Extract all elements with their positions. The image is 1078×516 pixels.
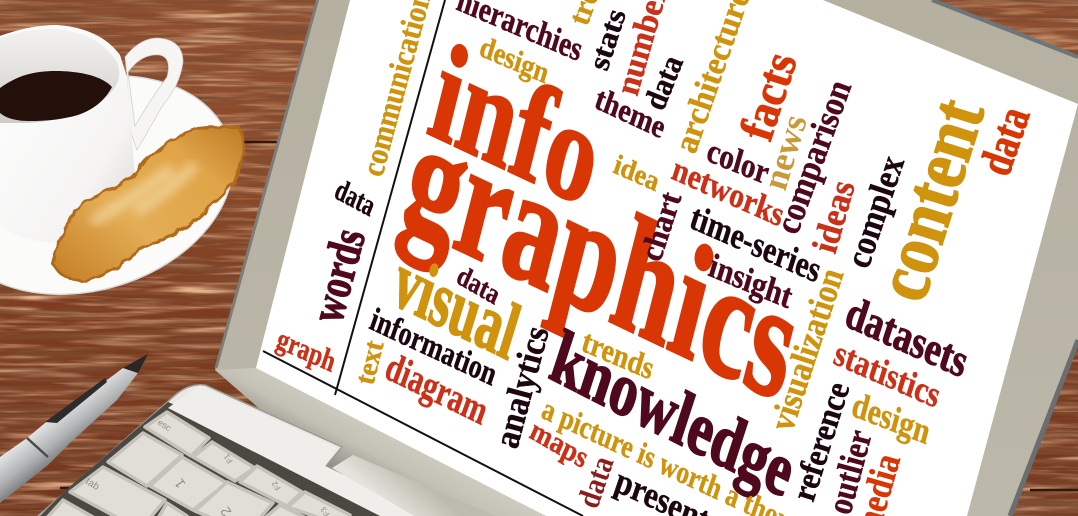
pen ring <box>27 438 48 457</box>
maps: maps <box>525 412 594 475</box>
networks: networks <box>668 150 789 234</box>
graph: graph <box>273 321 340 379</box>
data: data <box>452 260 505 311</box>
keyboard base <box>38 385 430 516</box>
outlier: outlier <box>819 426 880 516</box>
data: data <box>636 50 690 115</box>
pastry <box>52 126 244 282</box>
cup handle <box>125 38 183 150</box>
cup interior <box>0 29 119 123</box>
coffee <box>0 71 112 121</box>
design: design <box>476 29 553 90</box>
graphics: graphics <box>389 83 816 436</box>
cup body <box>0 25 135 242</box>
info: info <box>418 14 616 237</box>
pen clip <box>45 378 107 423</box>
data: data <box>969 100 1040 181</box>
datasets: datasets <box>840 286 974 387</box>
saucer <box>0 41 260 329</box>
chart axes on screen <box>263 0 583 516</box>
word cloud <box>273 0 1040 516</box>
news: news <box>754 110 815 194</box>
data: data <box>330 172 380 223</box>
visual: visual <box>384 235 529 377</box>
key labels <box>83 417 332 516</box>
stats: stats <box>582 5 633 74</box>
keys <box>45 412 350 516</box>
laptop keyboard deck <box>38 385 496 516</box>
facts: facts <box>730 46 808 146</box>
data: data <box>570 451 621 512</box>
pen <box>0 354 148 503</box>
visualization: visualization <box>762 263 852 435</box>
time-series: time-series <box>686 196 826 290</box>
key labels: F2 <box>270 479 283 492</box>
statistics: statistics <box>830 332 945 416</box>
reference: reference <box>785 378 857 505</box>
complex: complex <box>838 151 912 273</box>
color: color <box>703 132 773 192</box>
key labels: tab <box>83 476 101 493</box>
chart: chart <box>632 187 688 265</box>
idea: idea <box>610 149 663 198</box>
key well <box>40 402 430 516</box>
coffee cup on saucer <box>0 25 260 329</box>
key labels: esc <box>156 417 174 433</box>
words: words <box>300 223 376 328</box>
insight: insight <box>705 247 797 317</box>
design: design <box>848 384 935 452</box>
trends: trends <box>578 322 658 386</box>
content: content <box>859 89 1001 310</box>
analytics: analytics <box>486 322 557 452</box>
diagram: diagram <box>380 343 494 434</box>
upper plate <box>168 385 430 516</box>
information: information <box>365 301 501 393</box>
key labels: F1 <box>222 452 235 465</box>
text: text <box>350 337 391 388</box>
comparison: comparison <box>767 75 859 239</box>
key labels: 1 <box>171 476 188 491</box>
ideas: ideas <box>804 176 863 257</box>
white screen <box>256 0 1078 516</box>
theme: theme <box>591 80 670 145</box>
hinge <box>332 455 496 516</box>
